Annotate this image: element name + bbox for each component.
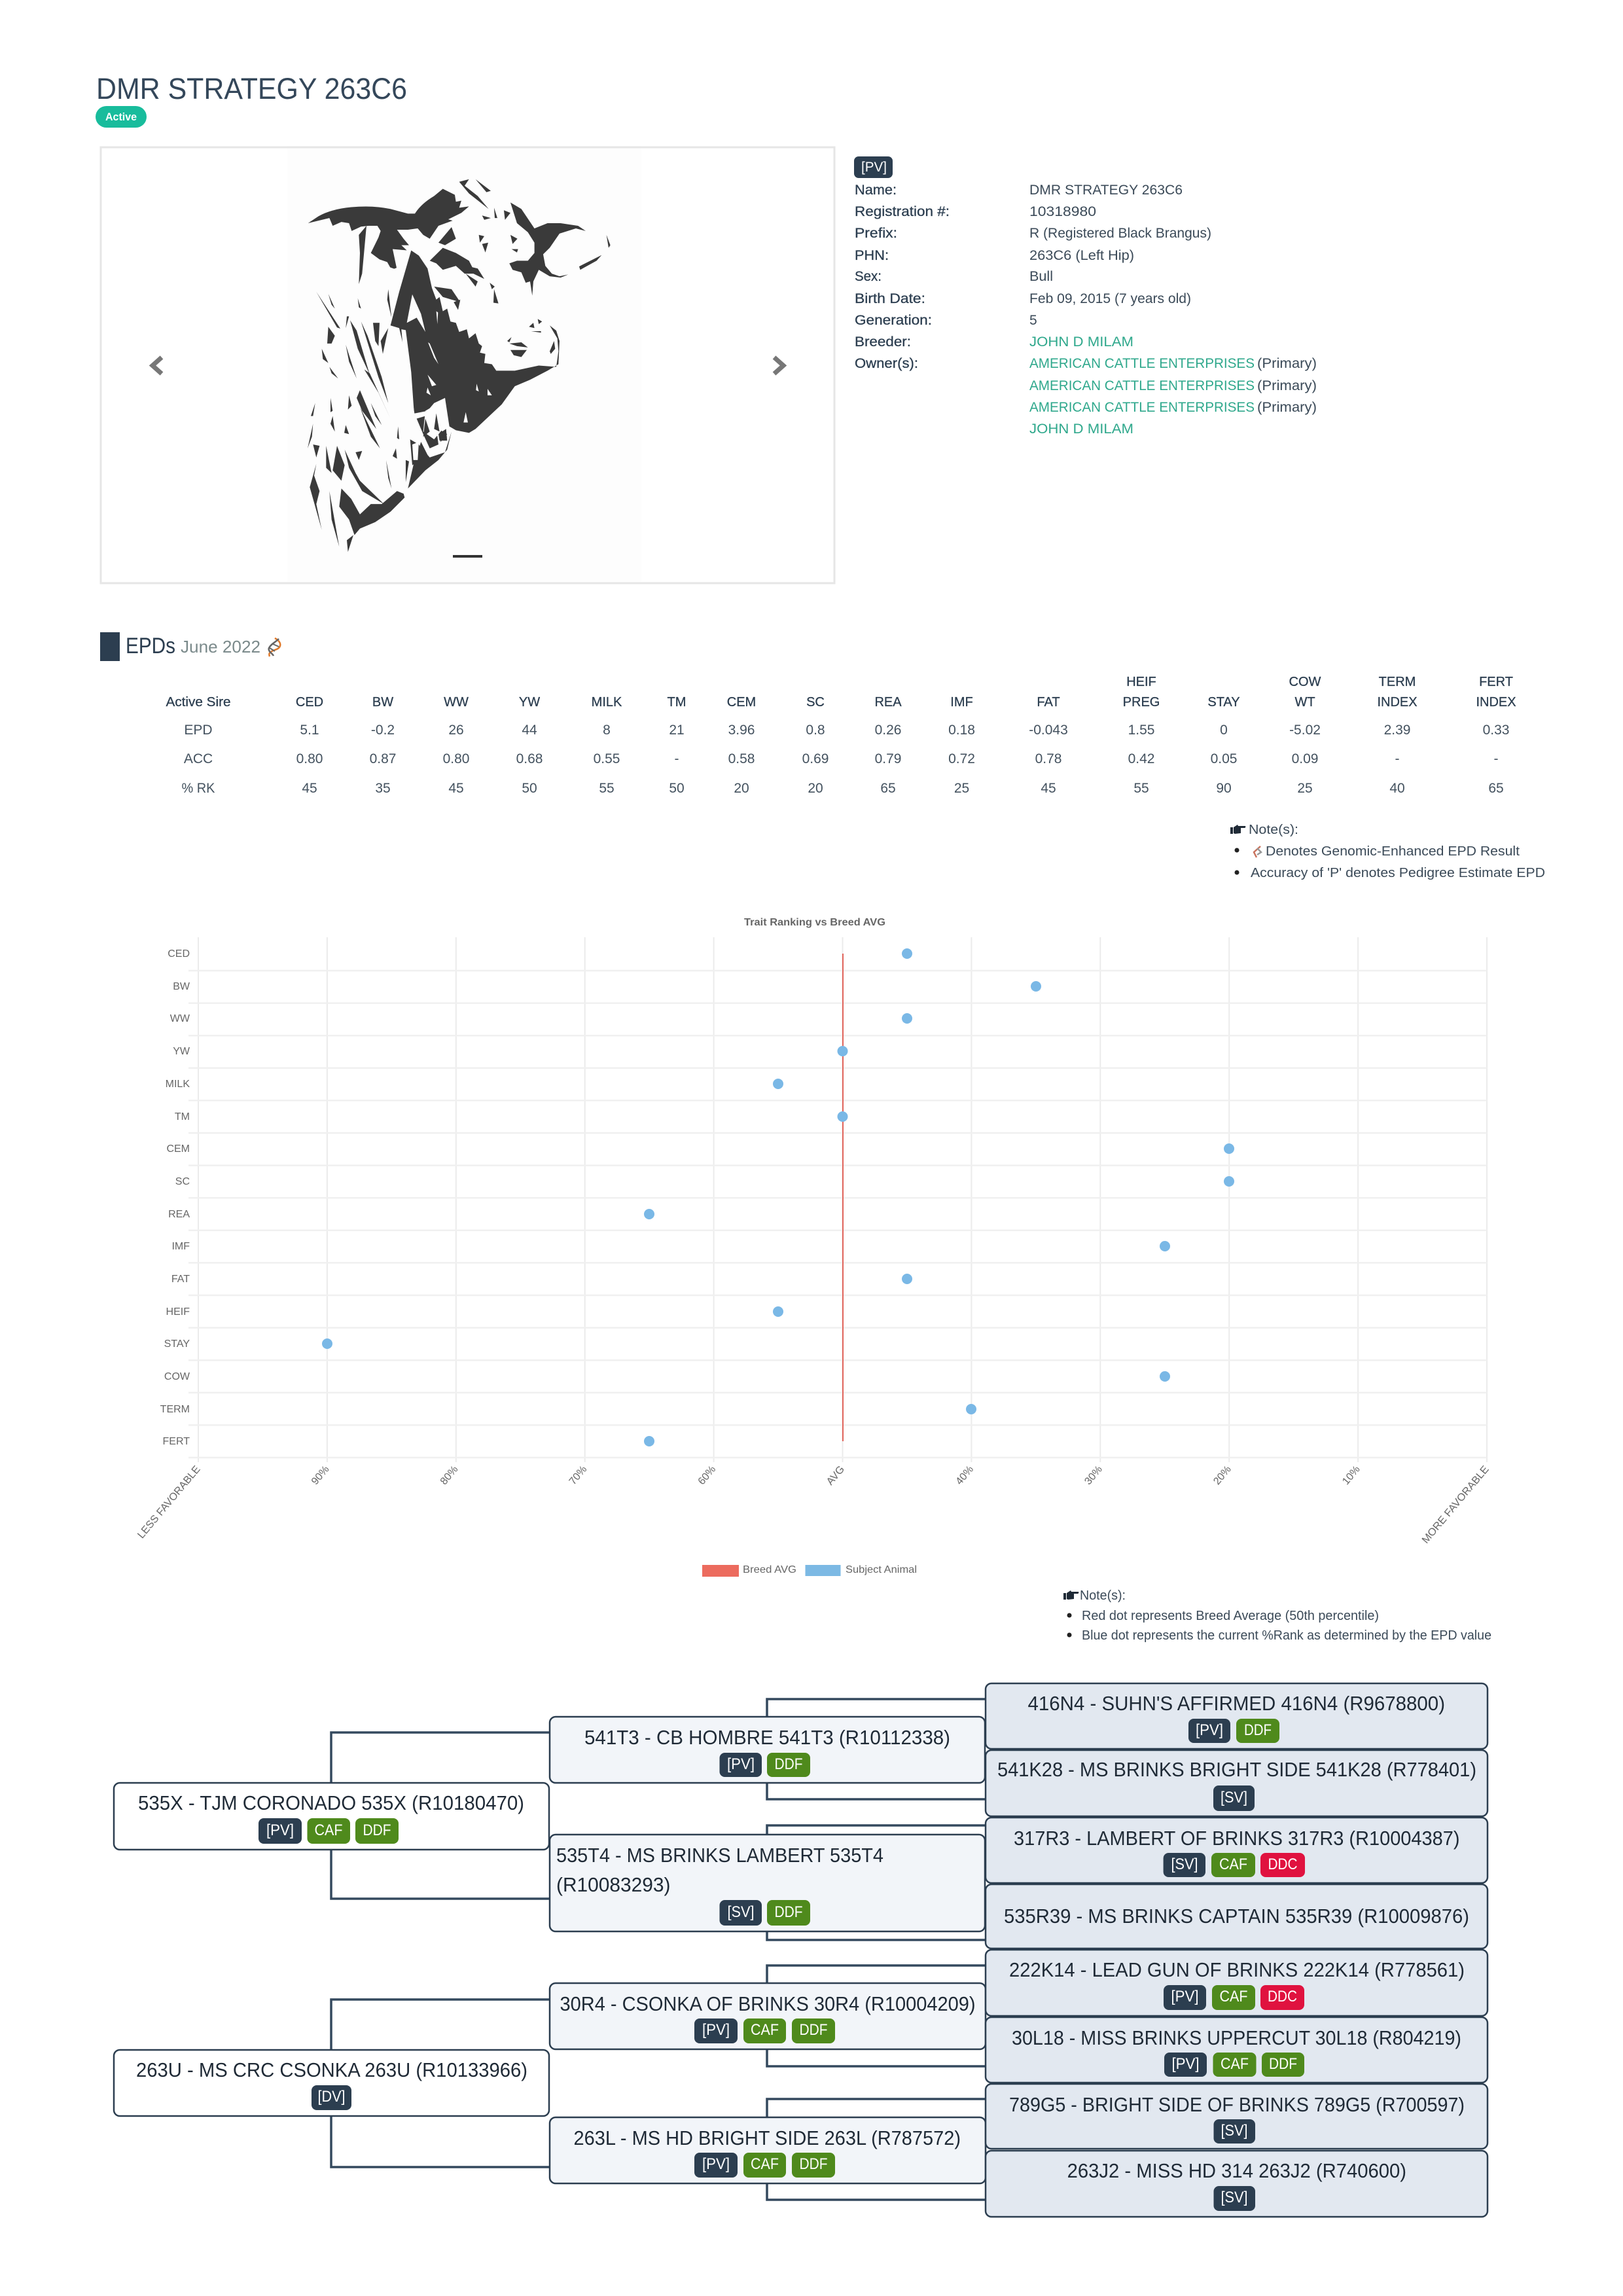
- pedigree node: 789G5: [986, 2084, 1488, 2149]
- heading: EPDs June 2022: EPDs: [126, 634, 175, 658]
- y-axis trait labels: CED: [168, 948, 190, 960]
- table row: % RK: [182, 781, 1504, 796]
- field values: [1029, 183, 1317, 437]
- icon: pointing hand: [1063, 1590, 1079, 1600]
- table header row: CED: [296, 695, 323, 709]
- table header row: Active Sire: [166, 695, 230, 709]
- table row: EPD: 21: [669, 723, 685, 738]
- x-axis percentile labels: LESS FAVORABLE: [135, 1464, 203, 1541]
- table header row: [166, 675, 1516, 709]
- table row: ACC: -: [1493, 751, 1499, 766]
- table row: EPD: EPD: [184, 723, 213, 738]
- pedigree node: 789G5: [SV]: [1221, 2122, 1247, 2140]
- table row: EPD: 1.55: [1128, 723, 1154, 738]
- field values: 5: [1029, 313, 1037, 328]
- table row: ACC: 0.78: [1035, 751, 1061, 766]
- status badge: Active: [96, 106, 147, 128]
- table header row: SC: [806, 695, 825, 709]
- icon: carousel next arrow: [774, 357, 783, 374]
- pedigree node: 30R4: [550, 1983, 986, 2049]
- table header row: HEIF: [1126, 675, 1156, 689]
- table row: EPD: -0.043: [1029, 723, 1068, 738]
- table row: ACC: 0.55: [594, 751, 620, 766]
- y-axis trait labels: REA: [168, 1209, 190, 1220]
- field values: (Primary): [1257, 378, 1317, 393]
- status badge: Active: Active: [105, 111, 137, 123]
- field labels: Prefix:: [855, 226, 897, 241]
- notes: chart: Red dot represents Breed Average (50th percentile): [1082, 1609, 1379, 1623]
- pedigree node: 541K28: 541K28 - MS BRINKS BRIGHT SIDE 541K28 (R778401): [997, 1758, 1476, 1781]
- pedigree node: 541T3: 541T3 - CB HOMBRE 541T3 (R10112338): [584, 1726, 950, 1749]
- pedigree node: 263L: 263L - MS HD BRIGHT SIDE 263L (R787572): [573, 2126, 961, 2149]
- pedigree node: 222K14: DDC: [1268, 1988, 1297, 2005]
- pedigree node: 30L18: 30L18 - MISS BRINKS UPPERCUT 30L18 (R804219): [1012, 2026, 1461, 2049]
- table row: EPD: [184, 723, 1509, 738]
- table row: % RK: 45: [1041, 781, 1056, 796]
- table row: % RK: 55: [1133, 781, 1149, 796]
- pedigree node: 263U: [114, 2050, 549, 2116]
- heading: EPDs June 2022: [100, 632, 280, 661]
- field labels: Registration #:: [855, 204, 950, 219]
- pedigree node: 535R39: [986, 1884, 1488, 1948]
- icon: bull head illustration: [308, 179, 611, 552]
- table row: ACC: ACC: [184, 751, 213, 766]
- table row: ACC: -: [1395, 751, 1399, 766]
- x-axis percentile labels: 20%: [1211, 1464, 1234, 1487]
- pedigree node: 535X: 535X - TJM CORONADO 535X (R10180470): [138, 1791, 524, 1814]
- table row: ACC: 0.09: [1292, 751, 1318, 766]
- table row: % RK: 20: [734, 781, 749, 796]
- pedigree node: 535X: CAF: [314, 1821, 343, 1839]
- table row: % RK: 55: [599, 781, 615, 796]
- table header row: WW: [444, 695, 469, 709]
- table row: % RK: 40: [1389, 781, 1405, 796]
- table row: % RK: 65: [880, 781, 896, 796]
- pedigree node: 416N4: [PV]: [1196, 1721, 1223, 1739]
- pedigree node: 535X: DDF: [363, 1821, 391, 1839]
- table row: ACC: [184, 751, 1499, 766]
- pedigree node: 263L: CAF: [751, 2155, 779, 2173]
- y-axis trait labels: TM: [175, 1111, 190, 1122]
- table row: EPD: 5.1: [300, 723, 319, 738]
- pedigree node: 263L: [PV]: [702, 2155, 730, 2173]
- pedigree node: 317R3: [SV]: [1171, 1856, 1198, 1873]
- table header row: COW: [1289, 675, 1321, 689]
- field values: AMERICAN CATTLE ENTERPRISES: [1029, 400, 1255, 415]
- pedigree connectors: [331, 1699, 986, 2200]
- table header row: BW: [372, 695, 393, 709]
- pedigree node: 30R4: [PV]: [702, 2021, 730, 2039]
- notes: EPD table: Accuracy of 'P' denotes Pedigree Estimate EPD: [1251, 866, 1545, 880]
- table row: ACC: 0.69: [802, 751, 829, 766]
- pedigree node: 535T4: [550, 1835, 985, 1931]
- pedigree node: 541K28: [SV]: [1221, 1789, 1247, 1806]
- notes: EPD table: [1230, 823, 1545, 880]
- field values: R (Registered Black Brangus): [1029, 226, 1211, 241]
- table row: EPD: 2.39: [1384, 723, 1410, 738]
- x-axis percentile labels: AVG: [825, 1464, 847, 1488]
- pedigree node: 30R4: CAF: [751, 2021, 779, 2039]
- pedigree node: 317R3: DDC: [1268, 1856, 1297, 1873]
- y-axis trait labels: FERT: [163, 1436, 190, 1447]
- x-axis percentile labels: 80%: [438, 1464, 460, 1487]
- pedigree node: 535T4: [SV]: [728, 1903, 754, 1921]
- y-axis trait labels: IMF: [171, 1241, 190, 1252]
- title: DMR STRATEGY 263C6: [96, 72, 407, 105]
- y-axis trait labels: TERM: [160, 1404, 190, 1415]
- table row: EPD: 8: [603, 723, 611, 738]
- table header row: FAT: [1037, 695, 1060, 709]
- pedigree node: 541K28: [986, 1750, 1488, 1816]
- field labels: Birth Date:: [855, 291, 925, 306]
- table row: ACC: 0.87: [370, 751, 396, 766]
- table row: EPD: 0.8: [806, 723, 825, 738]
- pedigree node: 30L18: [PV]: [1171, 2055, 1199, 2073]
- table header row: IMF: [950, 695, 973, 709]
- table header row: REA: [874, 695, 902, 709]
- table row: EPD: 3.96: [728, 723, 755, 738]
- x-axis percentile labels: MORE FAVORABLE: [1420, 1464, 1491, 1546]
- pedigree node: 541T3: DDF: [775, 1755, 802, 1773]
- panel: photo carousel: [101, 147, 834, 583]
- table row: ACC: -: [674, 751, 679, 766]
- table row: % RK: 65: [1488, 781, 1504, 796]
- y-axis trait labels: HEIF: [166, 1306, 190, 1318]
- pedigree node: 30L18: DDF: [1269, 2055, 1297, 2073]
- table row: % RK: 50: [669, 781, 685, 796]
- panel: animal details: [854, 156, 1317, 437]
- EPD table: [166, 675, 1516, 796]
- field values: JOHN D MILAM: [1029, 422, 1133, 437]
- table row: EPD: 0.33: [1483, 723, 1509, 738]
- table header row: TERM: [1379, 675, 1416, 689]
- pedigree node: 535X: [114, 1783, 549, 1850]
- y-axis trait labels: BW: [173, 981, 190, 992]
- pedigree node: 30L18: CAF: [1221, 2055, 1249, 2073]
- table row: ACC: 0.80: [443, 751, 469, 766]
- table row: % RK: 25: [1297, 781, 1313, 796]
- field values: 10318980: [1029, 204, 1096, 219]
- table row: EPD: 0: [1220, 723, 1228, 738]
- pedigree node: 222K14: CAF: [1220, 1988, 1247, 2005]
- pedigree node: 222K14: 222K14 - LEAD GUN OF BRINKS 222K14 (R778561): [1009, 1958, 1465, 1981]
- icon: DNA helix: [269, 638, 280, 656]
- table row: % RK: 90: [1216, 781, 1232, 796]
- y-axis trait labels: WW: [170, 1013, 190, 1024]
- pedigree node: 263J2: [SV]: [1221, 2189, 1247, 2206]
- field values: AMERICAN CATTLE ENTERPRISES: [1029, 378, 1255, 393]
- y-axis trait labels: CEM: [166, 1143, 190, 1155]
- chart title: Trait Ranking vs Breed AVG: [744, 917, 885, 928]
- chart legend: Breed AVG: [743, 1564, 796, 1575]
- pedigree chart: [114, 1683, 1488, 2217]
- table row: % RK: % RK: [182, 781, 215, 796]
- table row: ACC: 0.80: [296, 751, 323, 766]
- pedigree node: 541T3: [550, 1717, 985, 1783]
- badge: PV: [854, 156, 893, 178]
- table row: ACC: 0.79: [875, 751, 901, 766]
- field values: DMR STRATEGY 263C6: [1029, 183, 1183, 198]
- icon: DNA helix small: [1254, 846, 1261, 857]
- notes: chart: [1063, 1588, 1491, 1643]
- x-axis percentile labels: 60%: [696, 1464, 718, 1487]
- x-axis percentile labels: 30%: [1082, 1464, 1105, 1487]
- x-axis percentile labels: 10%: [1340, 1464, 1363, 1487]
- pedigree node: 416N4: DDF: [1244, 1721, 1272, 1739]
- pedigree node: 541T3: [PV]: [727, 1755, 755, 1773]
- pedigree node: 263U: [DV]: [318, 2088, 346, 2106]
- field values: JOHN D MILAM: [1029, 334, 1133, 350]
- pedigree node: 30R4: 30R4 - CSONKA OF BRINKS 30R4 (R10004209): [560, 1992, 975, 2015]
- pedigree node: 222K14: [986, 1950, 1488, 2016]
- table row: % RK: 25: [954, 781, 969, 796]
- pedigree node: 263U: 263U - MS CRC CSONKA 263U (R10133966): [136, 2058, 527, 2081]
- table row: EPD: 0.18: [948, 723, 975, 738]
- pedigree node: 263J2: [986, 2151, 1488, 2217]
- y-axis trait labels: SC: [175, 1176, 190, 1187]
- chart legend: Subject Animal: [846, 1564, 917, 1575]
- x-axis percentile labels: [135, 1464, 1491, 1546]
- pedigree node: 317R3: [986, 1818, 1488, 1883]
- field labels: Name:: [855, 183, 897, 198]
- table header row: STAY: [1207, 695, 1240, 709]
- table row: % RK: 20: [808, 781, 823, 796]
- table row: EPD: -0.2: [371, 723, 395, 738]
- pedigree node: 535R39: 535R39 - MS BRINKS CAPTAIN 535R39 (R10009876): [1004, 1905, 1469, 1928]
- table row: ACC: 0.58: [728, 751, 755, 766]
- table header row: FERT: [1479, 675, 1513, 689]
- pedigree node: 416N4: 416N4 - SUHN'S AFFIRMED 416N4 (R9678800): [1027, 1692, 1445, 1715]
- table header row: INDEX: [1377, 695, 1418, 709]
- field labels: PHN:: [855, 248, 889, 263]
- table row: EPD: -5.02: [1289, 723, 1321, 738]
- x-axis percentile labels: 90%: [310, 1464, 332, 1487]
- pedigree node: 263L: DDF: [800, 2155, 827, 2173]
- table row: EPD: 0.26: [875, 723, 901, 738]
- pedigree node: 222K14: [PV]: [1171, 1988, 1199, 2005]
- field values: AMERICAN CATTLE ENTERPRISES: [1029, 356, 1255, 371]
- field labels: Generation:: [855, 313, 932, 328]
- icon: pointing hand: [1230, 825, 1245, 834]
- notes: EPD table: Denotes Genomic-Enhanced EPD Result: [1266, 844, 1520, 859]
- table row: ACC: 0.42: [1128, 751, 1154, 766]
- badge: PV: [PV]: [861, 160, 887, 175]
- field values: 263C6 (Left Hip): [1029, 248, 1134, 263]
- field labels: Breeder:: [855, 334, 911, 350]
- table row: EPD: 26: [448, 723, 464, 738]
- y-axis trait labels: YW: [173, 1046, 190, 1057]
- pedigree node: 535T4: 535T4 - MS BRINKS LAMBERT 535T4: [556, 1844, 883, 1867]
- field labels: Sex:: [855, 269, 882, 284]
- table header row: PREG: [1123, 695, 1160, 709]
- table header row: WT: [1294, 695, 1315, 709]
- carousel indicator: [453, 555, 482, 558]
- x-axis percentile labels: 70%: [567, 1464, 589, 1487]
- table row: % RK: 45: [448, 781, 464, 796]
- y-axis trait labels: [160, 948, 190, 1447]
- table header row: YW: [519, 695, 540, 709]
- table header row: TM: [668, 695, 686, 709]
- icon: carousel previous arrow: [152, 357, 162, 374]
- field values: (Primary): [1257, 400, 1317, 415]
- notes: chart: Note(s):: [1080, 1588, 1126, 1603]
- table header row: MILK: [592, 695, 622, 709]
- pedigree node: 535T4: DDF: [775, 1903, 802, 1921]
- field values: Feb 09, 2015 (7 years old): [1029, 291, 1191, 306]
- x-axis percentile labels: 40%: [954, 1464, 976, 1487]
- field values: (Primary): [1257, 356, 1317, 371]
- pedigree node: 317R3: CAF: [1219, 1856, 1247, 1873]
- pedigree node: 30L18: [986, 2017, 1488, 2083]
- subject animal dots: [322, 948, 1234, 1446]
- table row: ACC: 0.72: [948, 751, 975, 766]
- y-axis trait labels: STAY: [164, 1338, 190, 1350]
- pedigree node: 317R3: 317R3 - LAMBERT OF BRINKS 317R3 (R10004387): [1014, 1827, 1459, 1850]
- pedigree node: 416N4: [986, 1683, 1488, 1749]
- pedigree node: 263J2: 263J2 - MISS HD 314 263J2 (R740600): [1067, 2159, 1406, 2182]
- table row: % RK: 50: [522, 781, 537, 796]
- notes: EPD table: Note(s):: [1249, 823, 1298, 837]
- y-axis trait labels: COW: [164, 1371, 190, 1382]
- notes: chart: Blue dot represents the current %Rank as determined by the EPD value: [1082, 1628, 1491, 1643]
- field labels: [855, 183, 950, 371]
- table row: ACC: 0.68: [516, 751, 543, 766]
- y-axis trait labels: MILK: [166, 1079, 190, 1090]
- table row: ACC: 0.05: [1211, 751, 1237, 766]
- table row: EPD: 44: [522, 723, 537, 738]
- pedigree node: 789G5: 789G5 - BRIGHT SIDE OF BRINKS 789G5 (R700597): [1009, 2093, 1465, 2116]
- table row: % RK: 45: [302, 781, 317, 796]
- pedigree node: 535T4: (R10083293): [556, 1873, 670, 1896]
- pedigree node: 30R4: DDF: [800, 2021, 827, 2039]
- breed average line: [842, 954, 844, 1441]
- field values: Bull: [1029, 269, 1053, 284]
- pedigree node: 263L: [550, 2117, 986, 2183]
- field labels: Owner(s):: [855, 356, 918, 371]
- table row: % RK: 35: [375, 781, 391, 796]
- heading: EPDs June 2022: June 2022: [181, 637, 260, 656]
- table header row: CEM: [727, 695, 756, 709]
- pedigree node: 535X: [PV]: [266, 1821, 294, 1839]
- table header row: INDEX: [1476, 695, 1516, 709]
- chart: Trait Ranking vs Breed AVG: [135, 917, 1491, 1577]
- y-axis trait labels: FAT: [171, 1274, 190, 1285]
- chart legend: [702, 1564, 917, 1577]
